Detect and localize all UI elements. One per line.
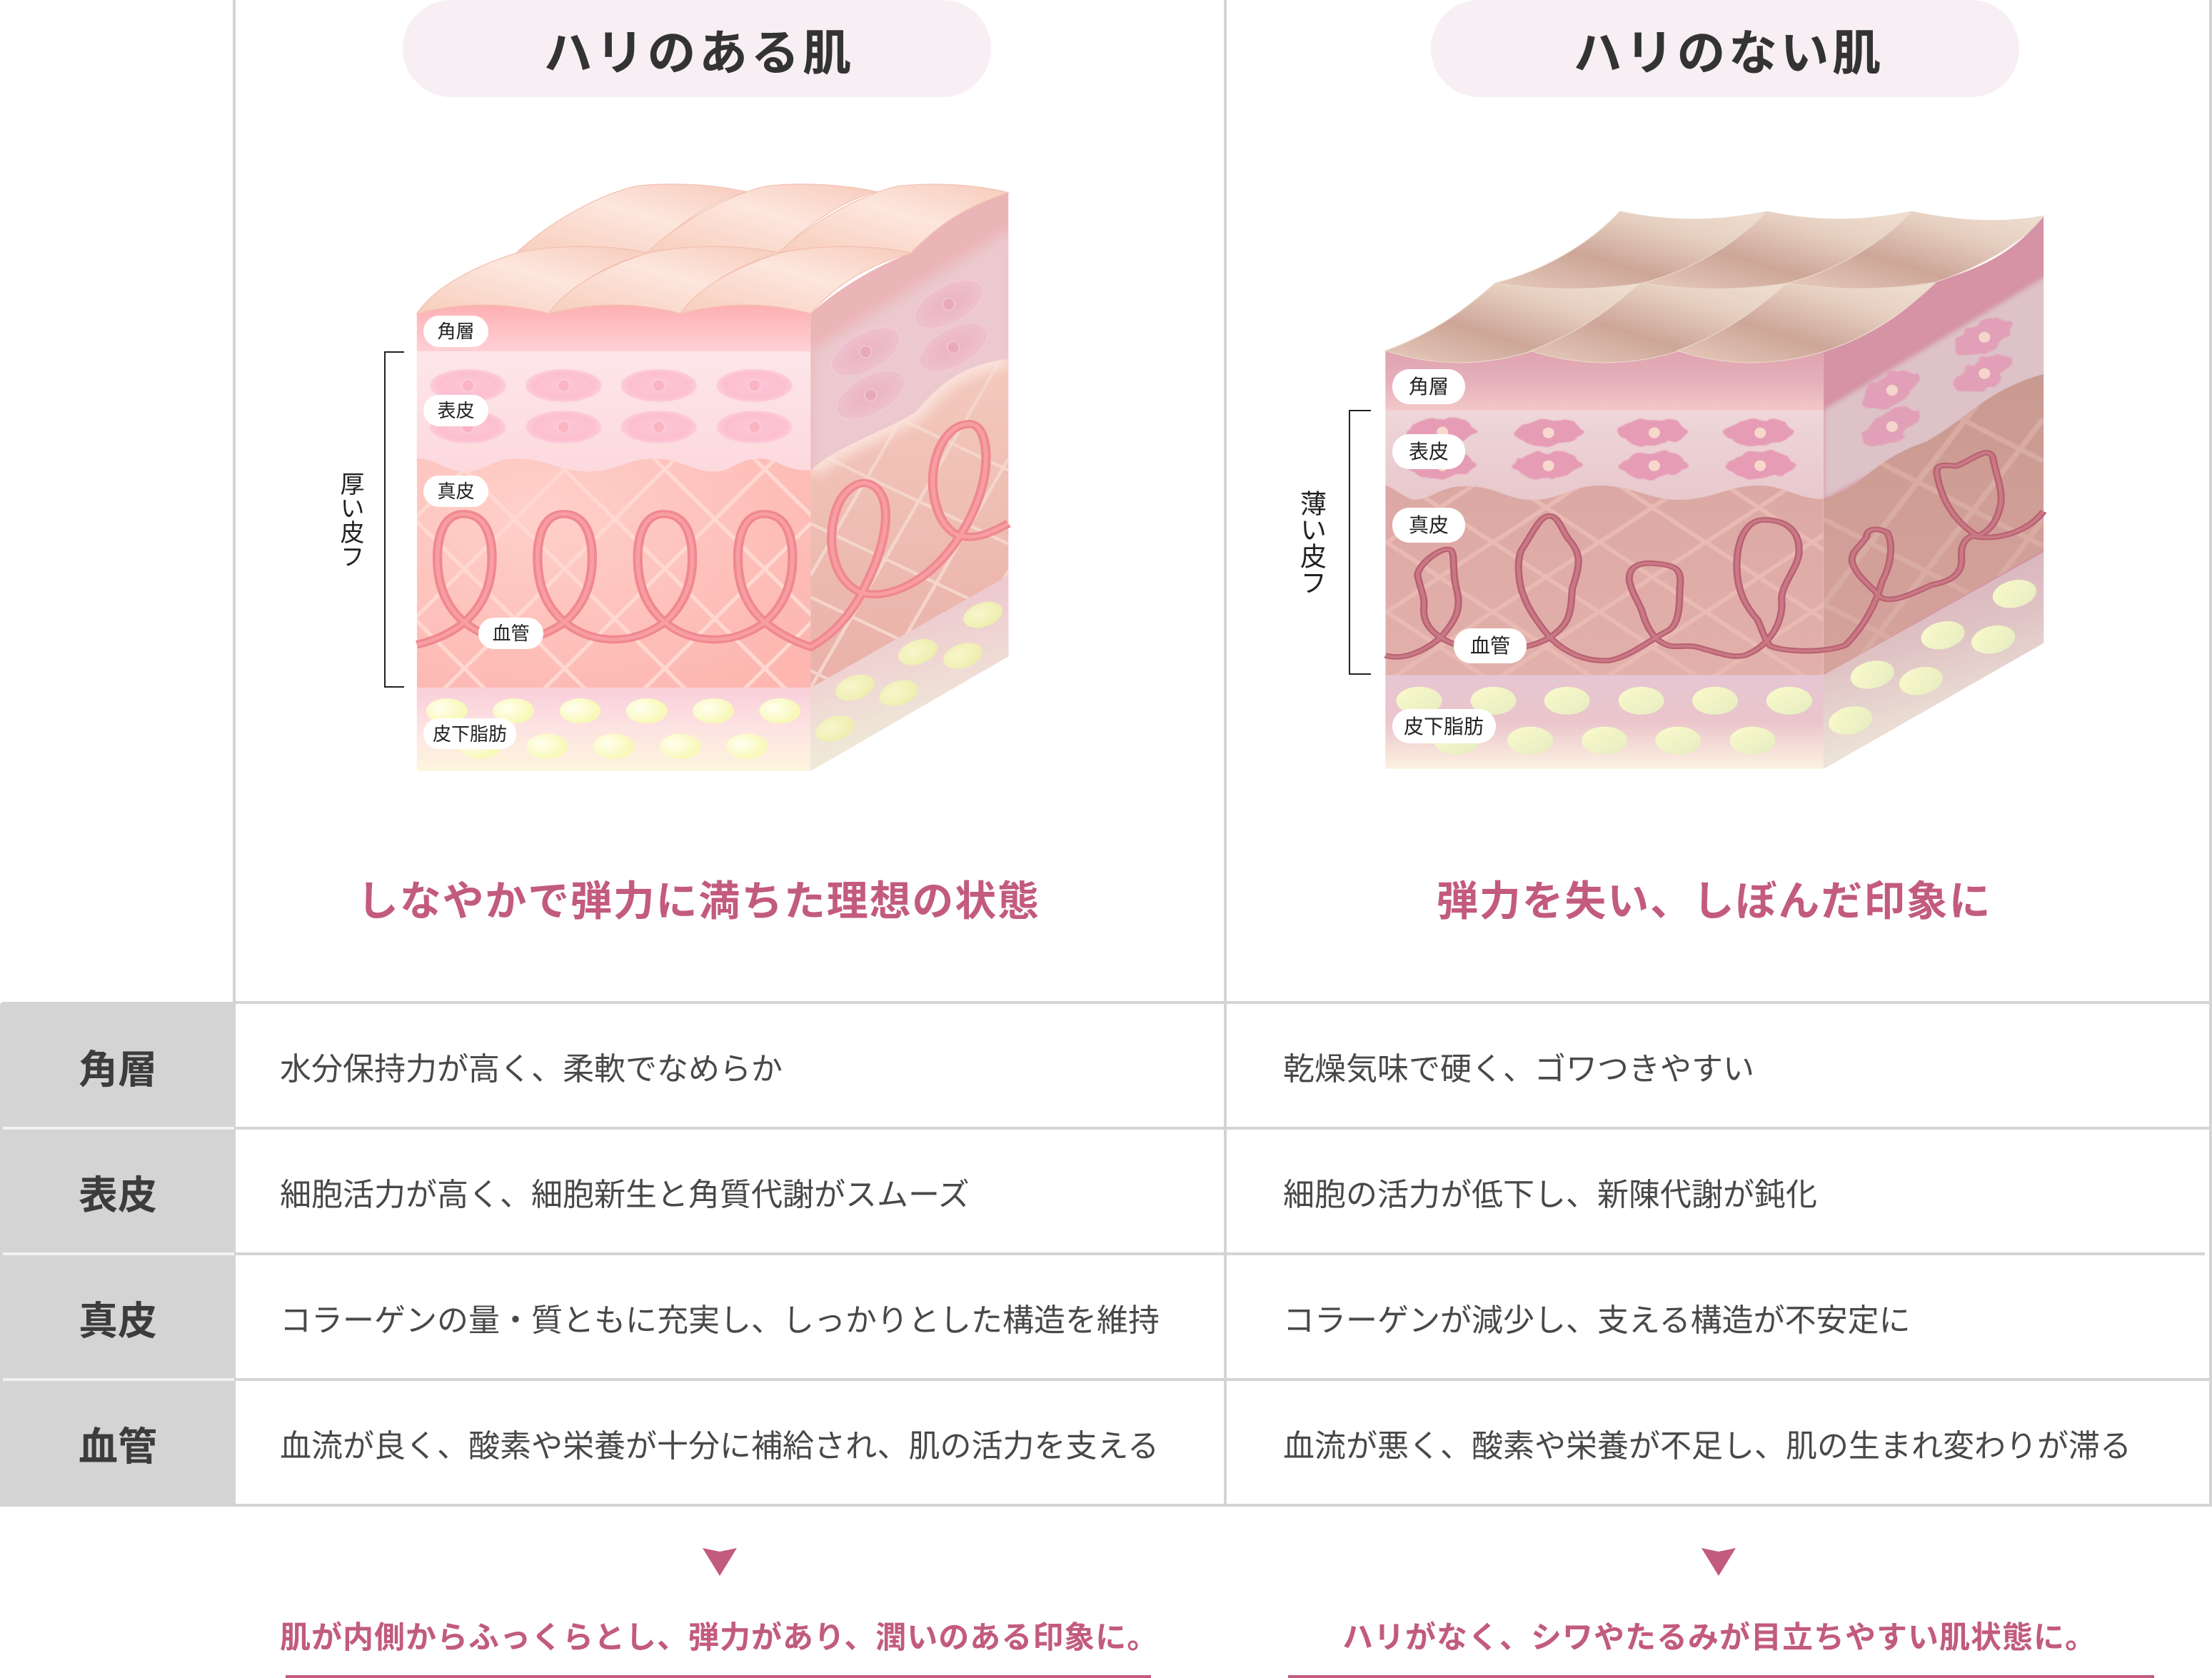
label: 表皮: 表皮 (437, 400, 475, 421)
illustration: firm skin cross-section (336, 184, 1011, 771)
label: 血管 (478, 618, 543, 649)
row text: 血管 loose: 血流が悪く、酸素や栄養が不足し、肌の生まれ変わりが滞る (1283, 1429, 2131, 1464)
row label: 真皮: 真皮 (79, 1299, 157, 1343)
row label: 角層: 角層 (79, 1048, 157, 1092)
label: 角層: 角層 (437, 321, 475, 342)
label: 薄い皮フ: 薄い皮フ (1297, 490, 1326, 596)
right face (810, 193, 1008, 771)
label: 表皮 (423, 395, 488, 426)
heading: ハリのある肌 (403, 0, 991, 97)
row text: 表皮 loose: 細胞の活力が低下し、新陳代謝が鈍化 (1283, 1177, 1817, 1212)
underline: loose (1288, 1675, 2154, 1678)
label: 皮下脂肪 (1392, 709, 1496, 743)
subtitle: loose skin: 弾力を失い、しぼんだ印象に (1437, 878, 1991, 925)
conclusion: firm: 肌が内側からふっくらとし、弾力があり、潤いのある印象に。 (280, 1621, 1158, 1655)
label: 表皮: 表皮 (1409, 441, 1449, 463)
label: 皮下脂肪: 皮下脂肪 (433, 723, 507, 745)
label: 角層 (1392, 369, 1465, 404)
bracket: thin skin (1349, 411, 1371, 674)
label: 真皮: 真皮 (1409, 514, 1449, 536)
arrow: loose (1701, 1548, 1736, 1576)
label: 表皮 (1392, 434, 1465, 469)
conclusion: loose: ハリがなく、シワやたるみが目立ちやすい肌状態に。 (1342, 1621, 2096, 1655)
label: 真皮: 真皮 (437, 481, 475, 502)
heading: ハリのある肌: ハリのある肌 (543, 26, 854, 81)
label: 血管: 血管 (1470, 635, 1510, 657)
underline: firm (286, 1675, 1151, 1678)
right face (1824, 216, 2043, 769)
heading: ハリのない肌 (1431, 0, 2019, 97)
label: 血管: 血管 (492, 623, 530, 644)
label: 角層: 角層 (1409, 376, 1449, 398)
row text: 角層 firm: 水分保持力が高く、柔軟でなめらか (280, 1052, 783, 1087)
top skin surface (1385, 211, 2043, 363)
label: 皮下脂肪 (423, 718, 516, 749)
front face (1385, 351, 1824, 411)
left header column (0, 1002, 236, 1507)
illustration: loose skin cross-section (1297, 211, 2046, 769)
label: 真皮 (1392, 508, 1465, 543)
row text: 角層 loose: 乾燥気味で硬く、ゴワつきやすい (1283, 1052, 1754, 1087)
label: 真皮 (423, 476, 488, 507)
blood vessel (417, 424, 1008, 647)
top skin surface (417, 184, 1008, 313)
front face (417, 305, 810, 351)
row label: 表皮: 表皮 (79, 1173, 157, 1217)
row text: 血管 firm: 血流が良く、酸素や栄養が十分に補給され、肌の活力を支える (280, 1429, 1159, 1464)
label: 血管 (1454, 628, 1527, 663)
arrow: firm (703, 1548, 737, 1576)
label: 角層 (423, 316, 488, 347)
subtitle: firm skin: しなやかで弾力に満ちた理想の状態 (357, 878, 1040, 925)
heading: ハリのない肌: ハリのない肌 (1573, 26, 1884, 81)
bracket: thick skin (385, 352, 404, 687)
row text: 真皮 loose: コラーゲンが減少し、支える構造が不安定に (1283, 1303, 1911, 1338)
row text: 真皮 firm: コラーゲンの量・質ともに充実し、しっかりとした構造を維持 (280, 1303, 1160, 1338)
row label: 血管: 血管 (79, 1425, 157, 1469)
label: 厚い皮フ: 厚い皮フ (336, 471, 364, 568)
blood vessel (1385, 453, 2043, 660)
row text: 表皮 firm: 細胞活力が高く、細胞新生と角質代謝がスムーズ (280, 1177, 970, 1212)
label: 皮下脂肪: 皮下脂肪 (1404, 715, 1484, 738)
